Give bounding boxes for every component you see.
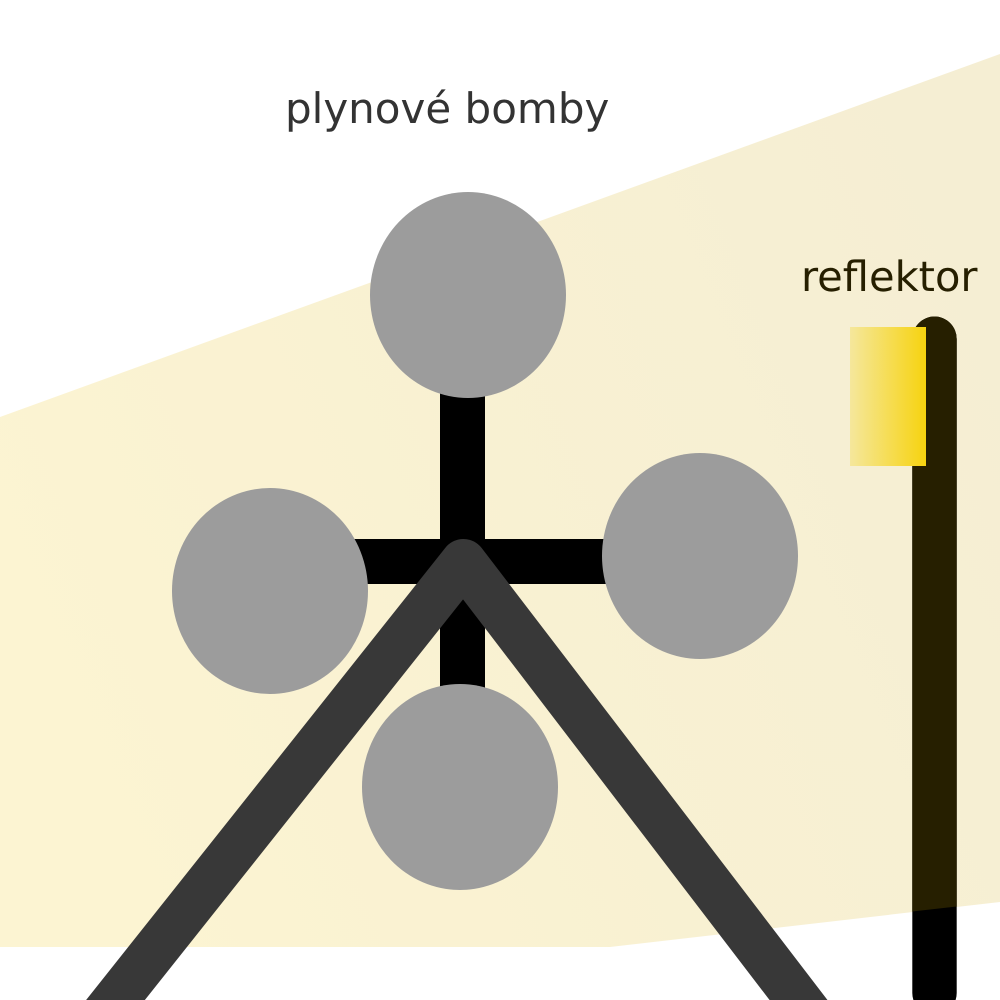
label: gas cylinders: plynové bomby <box>285 84 609 133</box>
tripod legs <box>100 562 814 1000</box>
label: reflector: reflektor <box>801 252 978 301</box>
reflector lamp <box>850 327 926 466</box>
cylinder support cross <box>340 380 620 700</box>
gas cylinder: top <box>370 192 566 398</box>
gas cylinder: bottom <box>362 684 558 890</box>
pole section inside the beam <box>912 316 957 912</box>
reflector pole <box>912 316 957 1000</box>
gas cylinder: right <box>602 453 798 659</box>
gas cylinder: left <box>172 488 368 694</box>
